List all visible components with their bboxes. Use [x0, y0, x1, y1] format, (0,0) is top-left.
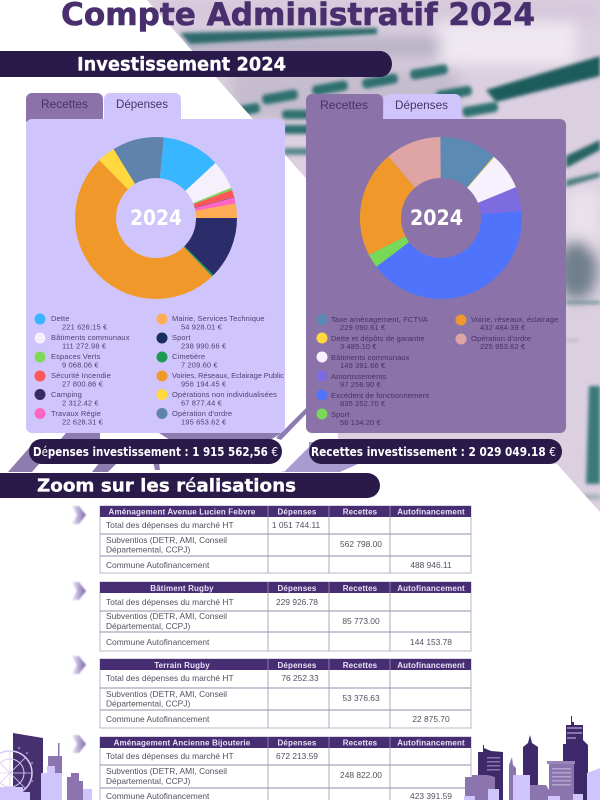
legend: recettes: 225 953.62 € — [480, 342, 526, 351]
total: recettes investissement — [309, 439, 562, 464]
table: Bâtiment Rugby: Autofinancement — [397, 584, 465, 593]
legend: recettes: Taxe aménagement, FCTVA — [331, 315, 428, 324]
icon: chevron arrow 2 — [72, 582, 86, 600]
legend: dépenses: 67 877.44 € — [181, 398, 223, 408]
icon: chevron arrow 4 — [72, 735, 86, 753]
legend: recettes: 97 256.90 € — [340, 380, 382, 389]
table: Bâtiment Rugby: Bâtiment Rugby — [150, 584, 214, 593]
table: Bâtiment Rugby: Recettes — [343, 584, 378, 593]
tab: Dépenses: Dépenses — [395, 98, 448, 112]
donut chart: dépenses: 2024 — [130, 206, 182, 230]
total: recettes investissement: Recettes investissement : 2 029 049.18 € — [311, 444, 556, 459]
table: Aménagement Avenue Lucien Febvre: 562 798.00 — [340, 539, 382, 549]
table: Aménagement Avenue Lucien Febvre — [100, 506, 471, 573]
legend: dépenses: 54 928.01 € — [181, 322, 223, 332]
table: Aménagement Avenue Lucien Febvre: Autofinancement — [397, 508, 465, 516]
legend: recettes: 149 391.66 € — [340, 361, 386, 370]
table: Bâtiment Rugby: 144 153.78 — [410, 637, 452, 647]
donut chart: dépenses — [96, 158, 216, 278]
table: Bâtiment Rugby: Dépenses — [278, 584, 317, 593]
legend: dépenses: Cimetière — [172, 352, 205, 361]
table: Aménagement Avenue Lucien Febvre: Recettes — [343, 508, 378, 516]
legend: dépenses: Travaux Régie — [51, 409, 101, 418]
banner: Zoom sur les réalisations: Zoom sur les réalisations — [37, 476, 296, 496]
legend: dépenses: Espaces Verts — [51, 352, 101, 361]
legend: recettes: 432 484.39 € — [480, 323, 526, 332]
table: Terrain Rugby: Commune Autofinancement — [106, 714, 210, 724]
tab: Recettes: Recettes — [41, 97, 88, 111]
table: Terrain Rugby — [100, 659, 471, 728]
table: Aménagement Avenue Lucien Febvre: 1 051 744.11 — [272, 520, 320, 530]
legend: dépenses: Sport — [172, 333, 191, 342]
table: Terrain Rugby: Total des dépenses du marché HT — [106, 673, 234, 683]
legend: dépenses: Sécurité Incendie — [51, 371, 111, 380]
table: Bâtiment Rugby: 85 773.00 — [342, 616, 380, 626]
total: dépenses investissement — [29, 439, 282, 464]
banner: Investissement 2024 — [0, 51, 392, 77]
donut chart: recettes — [380, 158, 502, 278]
tab: Dépenses: Dépenses — [116, 97, 168, 111]
tab: Recettes — [306, 94, 383, 122]
table: Aménagement Ancienne Bijouterie: Total des dépenses du marché HT — [106, 751, 234, 761]
table: Aménagement Ancienne Bijouterie: Autofinancement — [397, 738, 465, 748]
legend: recettes: 835 252.70 € — [340, 399, 386, 408]
table: Terrain Rugby: Départemental, CCPJ) — [106, 698, 190, 708]
legend: dépenses: 22 628.31 € — [62, 418, 104, 426]
table: Terrain Rugby: Subventios (DETR, AMI, Conseil — [106, 689, 227, 699]
legend: recettes: Excédent de fonctionnement — [331, 391, 430, 400]
illustration: left skyline — [0, 733, 92, 800]
total: dépenses investissement: Dépenses investissement : 1 915 562,56 € — [33, 444, 278, 459]
table: Terrain Rugby: 76 252.33 — [281, 673, 319, 683]
legend: dépenses — [34, 314, 284, 426]
legend: dépenses: 195 653.62 € — [181, 418, 227, 426]
tab: Dépenses — [104, 93, 181, 122]
legend: dépenses: 9 068.06 € — [62, 360, 99, 370]
table: Aménagement Ancienne Bijouterie: Subventios (DETR, AMI, Conseil — [106, 766, 227, 776]
tab: Recettes: Recettes — [320, 98, 368, 112]
donut chart: recettes: 2024 — [410, 206, 463, 230]
table: Aménagement Ancienne Bijouterie: 248 822.00 — [340, 770, 382, 780]
background diagonal bands — [8, 408, 358, 472]
tab: Dépenses — [384, 94, 461, 122]
table: Bâtiment Rugby: 229 926.78 — [276, 597, 318, 607]
table: Terrain Rugby: Recettes — [343, 661, 378, 670]
background photo: calculator — [147, 0, 600, 512]
legend: recettes — [316, 314, 558, 427]
table: Terrain Rugby: 53 376.63 — [342, 693, 380, 703]
banner: Investissement 2024: Investissement 2024 — [77, 54, 286, 76]
legend: dépenses: 27 800.86 € — [62, 380, 104, 388]
legend: dépenses: 111 272.98 € — [62, 342, 107, 350]
banner: Zoom sur les réalisations — [0, 473, 380, 498]
legend: dépenses: 238 990.66 € — [181, 342, 227, 350]
table: Terrain Rugby: Terrain Rugby — [154, 661, 210, 670]
table: Bâtiment Rugby: Subventios (DETR, AMI, Conseil — [106, 611, 227, 621]
table: Aménagement Avenue Lucien Febvre: Subventios (DETR, AMI, Conseil — [106, 535, 227, 545]
table: Terrain Rugby: Autofinancement — [397, 661, 465, 670]
legend: dépenses: Opération d'ordre — [172, 409, 232, 418]
table: Bâtiment Rugby — [100, 582, 471, 651]
table: Aménagement Ancienne Bijouterie: Départemental, CCPJ) — [106, 776, 190, 786]
table: Aménagement Avenue Lucien Febvre: Total des dépenses du marché HT — [106, 520, 234, 530]
legend: recettes: Dette et dépôts de garantie — [331, 334, 425, 343]
icon: chevron arrow 3 — [72, 656, 86, 674]
table: Aménagement Avenue Lucien Febvre: Commune Autofinancement — [106, 560, 210, 570]
legend: dépenses: Camping — [51, 390, 82, 399]
legend: recettes: Bâtiments communaux — [331, 353, 410, 362]
panel: Dépenses investissement — [26, 93, 285, 433]
legend: dépenses: 7 209.60 € — [181, 360, 218, 370]
legend: dépenses: Bâtiments communaux — [51, 333, 130, 342]
tab: Recettes — [26, 93, 103, 122]
legend: dépenses: Voiries, Réseaux, Eclairage Public — [172, 371, 284, 380]
icon: chevron arrow 1 — [72, 506, 86, 524]
legend: dépenses: 2 312.42 € — [62, 398, 99, 408]
table: Aménagement Avenue Lucien Febvre: 488 946.11 — [410, 560, 452, 570]
table: Aménagement Ancienne Bijouterie: Recettes — [343, 738, 378, 748]
legend: recettes: 229 090.61 € — [340, 323, 386, 332]
legend: recettes: 3 485.10 € — [340, 342, 377, 351]
table: Terrain Rugby: Dépenses — [278, 661, 317, 670]
table: Aménagement Avenue Lucien Febvre: Aménagement Avenue Lucien Febvre — [109, 508, 256, 516]
table: Aménagement Ancienne Bijouterie: Dépenses — [278, 738, 317, 748]
table: Bâtiment Rugby: Départemental, CCPJ) — [106, 621, 190, 631]
table: Aménagement Avenue Lucien Febvre: Départemental, CCPJ) — [106, 544, 190, 554]
legend: dépenses: Mairie, Services Technique — [172, 314, 265, 323]
legend: dépenses: Dette — [51, 314, 70, 323]
table: Bâtiment Rugby: Total des dépenses du marché HT — [106, 597, 234, 607]
panel: Recettes investissement — [306, 94, 566, 433]
illustration: right skyline — [464, 716, 600, 800]
legend: dépenses: 956 194.45 € — [181, 380, 227, 388]
legend: recettes: Amortissements — [331, 372, 387, 381]
table: Aménagement Ancienne Bijouterie: 672 213.59 — [276, 751, 318, 761]
table: Aménagement Ancienne Bijouterie: Aménagement Ancienne Bijouterie — [114, 738, 251, 748]
legend: dépenses: Opérations non individualisées — [172, 390, 277, 399]
legend: recettes: Sport — [331, 410, 350, 419]
legend: dépenses: 221 626;15 € — [62, 322, 108, 332]
table: Terrain Rugby: 22 875.70 — [412, 714, 450, 724]
legend: recettes: Opération d'ordre — [471, 334, 531, 343]
legend: recettes: Voirie, réseaux, éclairage — [471, 315, 558, 324]
table: Bâtiment Rugby: Commune Autofinancement — [106, 637, 210, 647]
legend: recettes: 56 134.20 € — [340, 418, 382, 427]
table: Aménagement Ancienne Bijouterie — [100, 737, 471, 800]
table: Aménagement Avenue Lucien Febvre: Dépenses — [278, 508, 317, 516]
